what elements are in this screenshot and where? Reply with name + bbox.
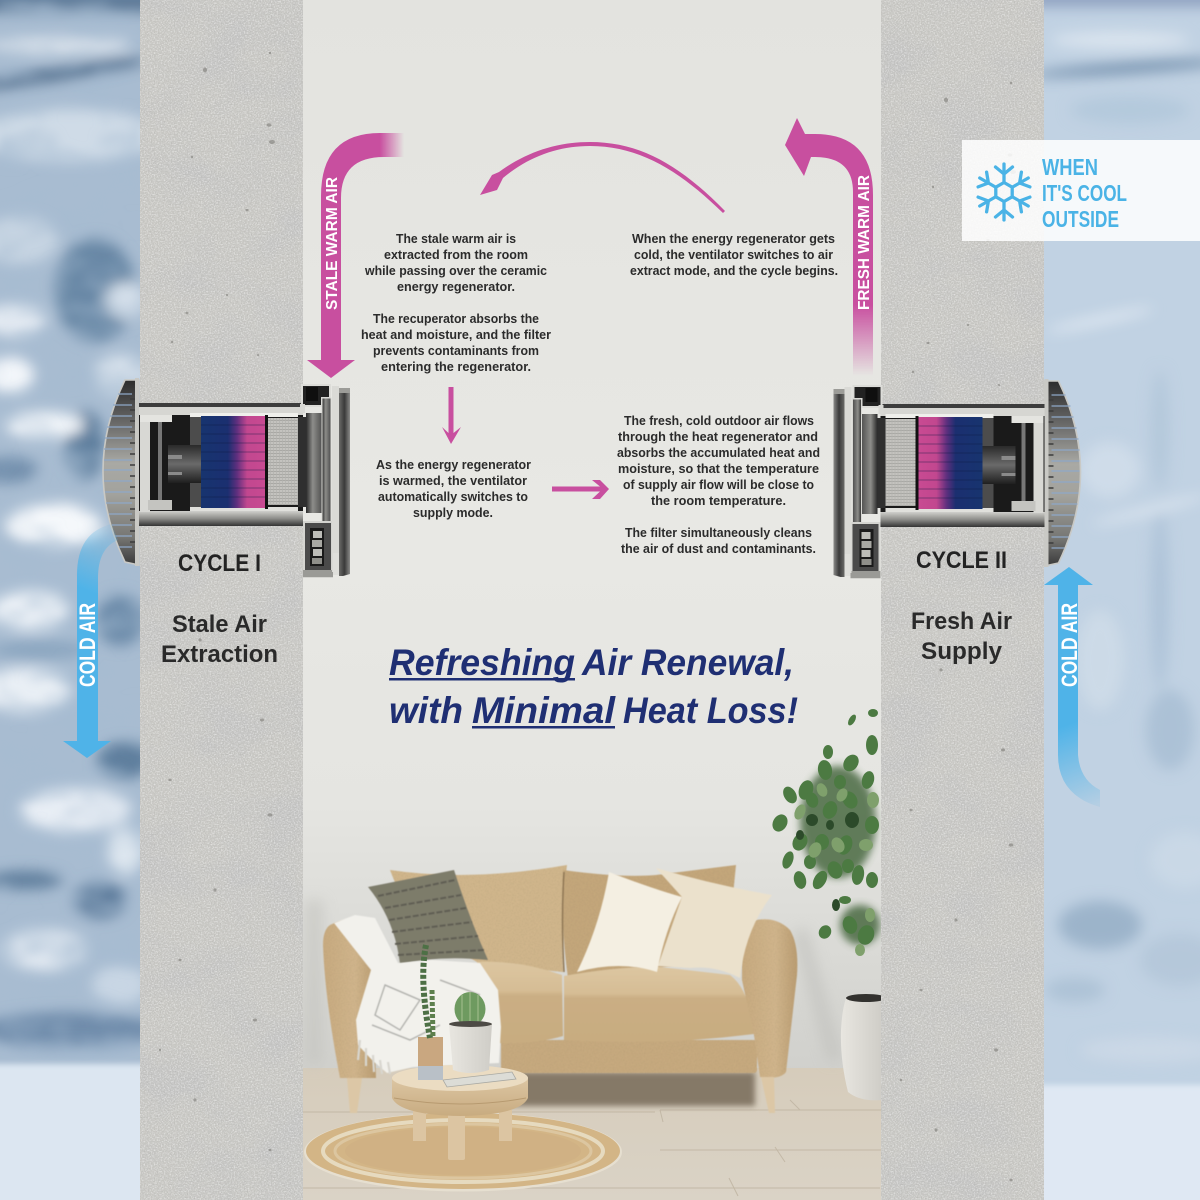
- text: fresh air supply steps: through the heat regenerator and: [618, 430, 818, 444]
- concrete wall left: [140, 0, 303, 1200]
- label: stale warm air: STALE WARM AIR: [324, 177, 341, 310]
- heading: Minimal: [472, 690, 616, 731]
- cycle I label: [161, 550, 278, 668]
- sofa back and cushions: [323, 865, 797, 1113]
- callout: when it's cool outside: [962, 140, 1200, 241]
- coffee table: [392, 1065, 528, 1116]
- text: stale air extraction steps: while passing over the ceramic: [364, 264, 547, 278]
- heading: Refreshing: [389, 642, 575, 683]
- cream pillows: [577, 868, 772, 978]
- text: fresh air supply steps: moisture, so that the temperature: [618, 462, 819, 476]
- text: regenerator warmed: [376, 458, 531, 520]
- text: fresh air supply steps: the room temperature.: [651, 494, 786, 508]
- callout: when it's cool outside: IT'S COOL: [1042, 180, 1127, 206]
- text: fresh air supply steps: of supply air flow will be close to: [623, 478, 814, 492]
- arrow: right between steps: [552, 480, 609, 499]
- heading: Air Renewal,: [581, 642, 794, 683]
- ventilator cycle I: [103, 378, 350, 577]
- heading: Heat Loss!: [623, 690, 798, 731]
- rug: [304, 1112, 622, 1192]
- arrow: curved cycle return: [480, 142, 725, 213]
- text: stale air extraction steps: prevents contaminants from: [373, 344, 539, 358]
- text: regenerator cold: cold, the ventilator switches to air: [634, 248, 833, 262]
- cycle I label: CYCLE I: [178, 550, 261, 577]
- heading: with: [389, 690, 463, 731]
- text: regenerator warmed: is warmed, the ventilator: [379, 474, 527, 488]
- plant: [769, 709, 880, 956]
- cycle II label: Fresh Air: [911, 608, 1012, 635]
- coffee table legs: [413, 1110, 512, 1160]
- book: [443, 1072, 516, 1087]
- background: snowy forest left: [0, 0, 170, 1200]
- text: fresh air supply steps: the air of dust and contaminants.: [621, 542, 816, 556]
- label: cold air left: COLD AIR: [75, 603, 100, 687]
- arrow: down between steps: [442, 387, 461, 444]
- label: cold air right: COLD AIR: [1057, 603, 1082, 687]
- text: fresh air supply steps: absorbs the accumulated heat and: [617, 446, 820, 460]
- floor planter: [841, 994, 886, 1100]
- text: stale air extraction steps: extracted from the room: [384, 248, 528, 262]
- sofa shadow: [500, 1072, 755, 1106]
- gray pillow: [368, 870, 488, 964]
- cycle I label: Extraction: [161, 641, 278, 668]
- cycle I label: Stale Air: [172, 611, 267, 638]
- arrow: cold air down: [63, 524, 118, 758]
- callout: when it's cool outside: WHEN: [1042, 154, 1098, 180]
- text: fresh air supply steps: The filter simultaneously cleans: [625, 526, 812, 540]
- ventilator cycle II: [834, 379, 1080, 578]
- concrete wall right: [881, 0, 1044, 1200]
- icon: snowflake: [976, 164, 1032, 220]
- text: stale air extraction steps: [361, 232, 551, 374]
- arrow: fresh warm air: [785, 118, 873, 378]
- text: regenerator warmed: automatically switches to: [378, 490, 528, 504]
- heading: [389, 642, 798, 731]
- blanket: [334, 915, 501, 1074]
- background: snowy forest right: [1030, 0, 1200, 1200]
- arrow: stale warm air: [307, 133, 404, 378]
- text: regenerator cold: extract mode, and the cycle begins.: [630, 264, 838, 278]
- text: stale air extraction steps: The stale warm air is: [396, 232, 516, 246]
- text: stale air extraction steps: energy regenerator.: [397, 280, 515, 294]
- text: regenerator warmed: As the energy regenerator: [376, 458, 531, 472]
- wall shadow strokes: [305, 900, 835, 1065]
- arrow: cold air up: [1044, 567, 1100, 807]
- floor: [303, 1068, 881, 1200]
- vase with sprig: [418, 945, 443, 1080]
- cycle II label: CYCLE II: [916, 547, 1007, 574]
- text: fresh air supply steps: The fresh, cold outdoor air flows: [624, 414, 814, 428]
- cycle II label: Supply: [921, 638, 1003, 665]
- text: stale air extraction steps: entering the regenerator.: [381, 360, 531, 374]
- room interior: [303, 0, 886, 1200]
- callout: when it's cool outside: OUTSIDE: [1042, 206, 1119, 232]
- label: fresh warm air: FRESH WARM AIR: [856, 175, 873, 310]
- text: stale air extraction steps: The recuperator absorbs the: [373, 312, 539, 326]
- text: stale air extraction steps: heat and moisture, and the filter: [361, 328, 551, 342]
- text: fresh air supply steps: [617, 414, 820, 556]
- text: regenerator warmed: supply mode.: [413, 506, 493, 520]
- text: regenerator cold: [630, 232, 838, 278]
- text: regenerator cold: When the energy regenerator gets: [632, 232, 835, 246]
- cycle II label: [911, 547, 1012, 665]
- cactus pot: [449, 992, 492, 1073]
